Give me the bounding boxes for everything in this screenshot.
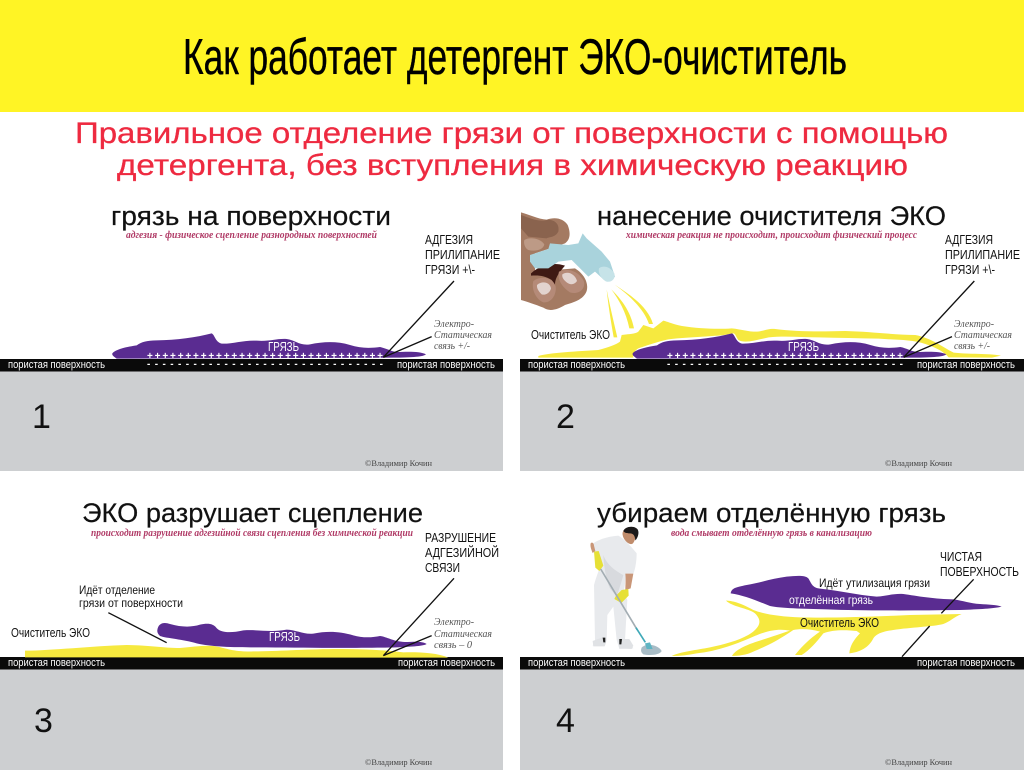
clean surface label [940,549,1019,579]
panel heading: убираем отделённую грязь [597,498,946,528]
cleaner layer [25,645,448,658]
electrostatic label: связь – 0 [434,639,472,651]
spray jets [607,285,653,337]
panel 2: applying the cleaner [520,201,1024,471]
grey base [0,669,503,770]
adhesion label: ГРЯЗИ +\- [945,262,995,277]
panel heading: ЭКО разрушает сцепление [82,498,423,528]
surface labels [528,359,1015,371]
leader lines [108,578,454,656]
adhesion break label [425,530,499,575]
subtitle: Правильное отделение грязи от поверхности с помощью [75,117,948,150]
dirt label: ГРЯЗЬ [269,629,300,644]
grey base [520,669,1024,770]
electrostatic label: связь +/- [434,340,470,352]
dirt blob [112,333,426,359]
minus charges: ------------------------------- [667,359,903,370]
surface labels: пористая поверхность [8,359,105,371]
electrostatic label: Статическая [954,329,1012,341]
surface labels: пористая поверхность [8,657,105,669]
electrostatic label: связь +/- [954,340,990,352]
adhesion label [945,232,1020,277]
plus charges: +++++++++++++++++++++++++++++++ [667,351,903,362]
cleaner label: Очиститель ЭКО [800,615,879,630]
separation label: Идёт отделение [79,585,155,597]
surface bar [520,359,1024,372]
surface bar [520,657,1024,670]
surface labels: пористая поверхность [528,359,625,371]
adhesion break label: РАЗРУШЕНИЕ [425,530,496,545]
number 2: 2 [556,398,575,436]
electrostatic label: Электро- [434,318,474,330]
leader lines [902,579,974,657]
surface bar [0,657,503,670]
surface labels [8,359,495,371]
copyright: ©Владимир Кочин [365,458,432,468]
cleaner layer [538,321,1001,358]
adhesion label: ПРИЛИПАНИЕ [425,247,500,262]
grey base [0,371,503,471]
header band [0,0,1024,112]
surface bar [0,359,503,372]
electrostatic label [954,318,1012,352]
electrostatic label: Электро- [954,318,994,330]
panel note: происходит разрушение адгезийной связи сцепления без химической реакции [91,528,413,539]
plus charges: +++++++++++++++++++++++++++++++ [147,351,383,362]
panel heading: грязь на поверхности [111,201,391,231]
cleaner label: Очиститель ЭКО [531,327,610,342]
subtitle [75,117,948,182]
panel note: химическая реакция не происходит, происходит физический процесс [625,230,918,241]
panel note: вода смывает отделённую грязь в канализацию [671,528,872,539]
surface labels: пористая поверхность [398,657,495,669]
panel 4: removing the separated dirt [520,498,1024,770]
adhesion label [425,232,500,277]
subtitle: детергента, без вступления в химическую реакцию [117,149,908,182]
copyright: ©Владимир Кочин [885,757,952,767]
electrostatic label: Статическая [434,628,492,640]
disposal label: Идёт утилизация грязи [819,576,930,590]
surface labels [528,657,1015,669]
icon: hand with spray trigger [521,212,615,310]
dirt blob [157,623,427,648]
minus charges: ------------------------------- [147,359,383,370]
adhesion label: ГРЯЗИ +\- [425,262,475,277]
electrostatic label [434,318,492,352]
electrostatic label: Статическая [434,329,492,341]
dirt label: ГРЯЗЬ [788,339,819,354]
surface labels: пористая поверхность [528,657,625,669]
leader lines [904,281,974,357]
separation label [79,585,183,610]
number 3: 3 [34,702,53,740]
panel 3: ECO breaks adhesion [0,498,503,770]
electrostatic label [434,616,492,651]
icon: man with mop [590,527,662,655]
adhesion break label: СВЯЗИ [425,560,460,575]
copyright: ©Владимир Кочин [885,458,952,468]
surface labels [8,657,495,669]
grey base [520,371,1024,471]
cleaner shape [672,601,962,656]
separation label: грязи от поверхности [79,598,183,610]
panel 1: dirt on the surface [0,201,503,471]
leader lines [383,281,454,357]
dirt label: ГРЯЗЬ [268,339,299,354]
electrostatic label: Электро- [434,616,474,628]
panel note: адгезия - физическое сцепление разнородных поверхностей [126,230,377,241]
clean surface label: ЧИСТАЯ [940,549,982,564]
surface labels: пористая поверхность [397,359,495,371]
dirt blob [633,333,946,359]
copyright: ©Владимир Кочин [365,757,432,767]
adhesion break label: АДГЕЗИЙНОЙ [425,545,499,560]
adhesion label: АДГЕЗИЯ [425,232,473,247]
number 4: 4 [556,702,575,740]
separated dirt label: отделённая грязь [789,593,873,607]
dirt shape [731,576,1002,610]
adhesion label: АДГЕЗИЯ [945,232,993,247]
panel heading: нанесение очистителя ЭКО [597,201,946,231]
number 1: 1 [32,398,51,436]
cleaner label: Очиститель ЭКО [11,625,90,640]
